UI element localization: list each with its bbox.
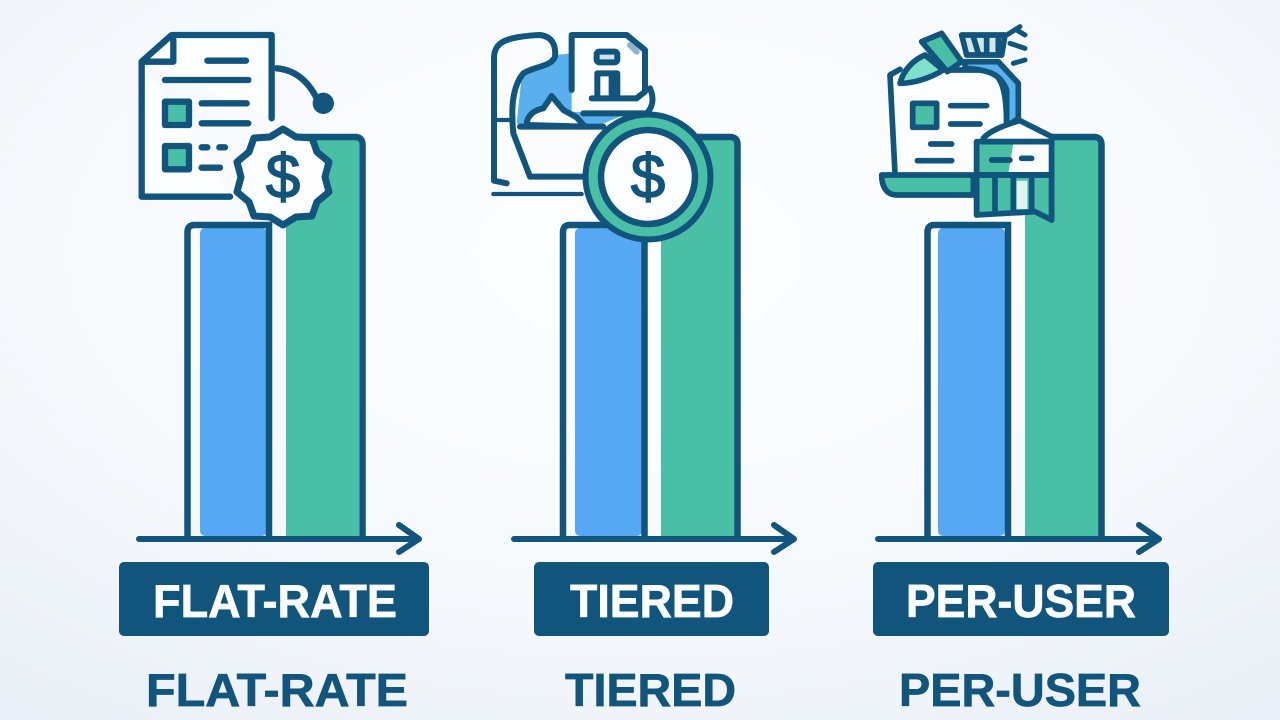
column: per-user bbox=[873, 27, 1169, 716]
column: tiered bbox=[493, 35, 794, 716]
axis arrow bbox=[139, 525, 419, 552]
icon: coin: $ bbox=[631, 143, 665, 212]
label box: per-user bbox=[873, 562, 1169, 636]
axis arrow bbox=[514, 525, 794, 552]
icon: laptop, tools and building bbox=[882, 27, 1052, 220]
icon text: dollar sign: $ bbox=[266, 143, 300, 212]
caption: flat-rate: FLAT-RATE bbox=[146, 664, 408, 716]
bar chart: per-user bbox=[928, 137, 1102, 537]
label box: tiered: TIERED bbox=[570, 575, 734, 627]
column: flat-rate bbox=[119, 35, 429, 716]
caption: per-user: PER-USER bbox=[899, 664, 1141, 716]
bar chart: tiered bbox=[563, 137, 738, 537]
icon: coin bbox=[586, 114, 710, 240]
label box: per-user: PER-USER bbox=[906, 575, 1136, 627]
label box: tiered bbox=[534, 562, 769, 636]
label box: flat-rate: FLAT-RATE bbox=[153, 575, 397, 627]
icon: document with price gear bbox=[142, 35, 334, 225]
icon: storefront document bbox=[493, 35, 652, 194]
axis arrow bbox=[878, 525, 1159, 552]
label box: flat-rate bbox=[119, 562, 429, 636]
bar chart: flat-rate bbox=[188, 137, 362, 537]
caption: tiered: TIERED bbox=[565, 664, 736, 716]
